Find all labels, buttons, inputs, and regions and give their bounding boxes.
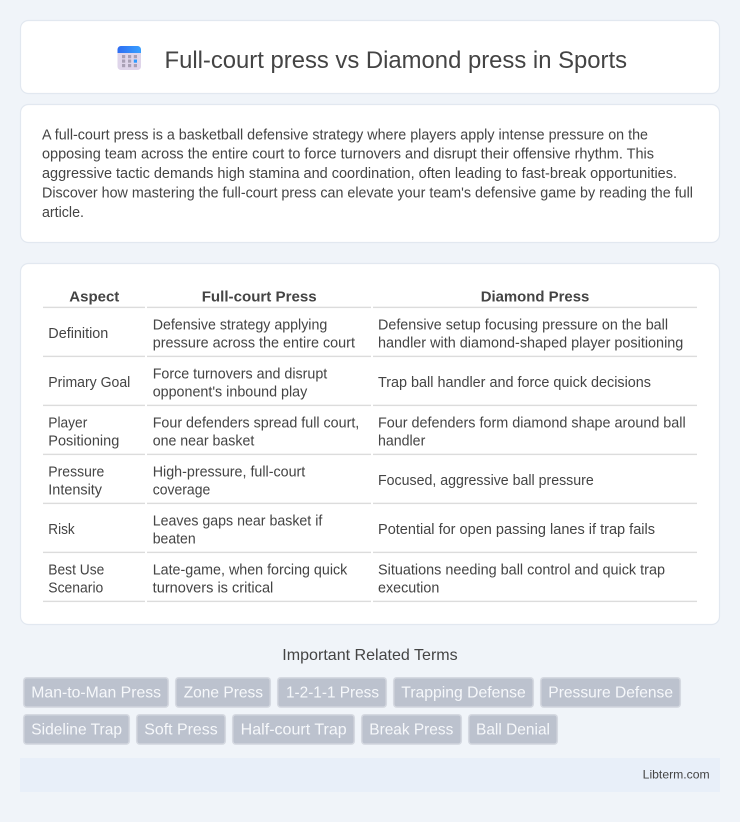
table row: definition: handler with diamond-shaped player positioning (378, 335, 683, 351)
tag: Trapping Defense (394, 678, 533, 707)
tag: Sideline Trap: Sideline Trap (31, 722, 122, 738)
table row: primary goal: Force turnovers and disrupt (153, 366, 327, 382)
tag: Ball Denial (469, 715, 557, 744)
table row: risk: Risk (48, 522, 75, 538)
table header row (43, 289, 697, 308)
tag: Soft Press: Soft Press (144, 722, 218, 738)
table row: primary goal: opponent's inbound play (153, 384, 308, 400)
tag: Man-to-Man Press (24, 678, 168, 707)
table row: pressure intensity: High-pressure, full-court (153, 464, 305, 480)
tag: Break Press (362, 715, 461, 744)
title: Full-court press vs Diamond press in Sports (164, 47, 627, 74)
table row: risk: beaten (153, 531, 196, 547)
footer bar (20, 758, 720, 792)
table row: primary goal: Trap ball handler and force quick decisions (378, 375, 651, 391)
table row: player positioning: Four defenders spread full court, (153, 415, 359, 431)
tag: Trapping Defense: Trapping Defense (401, 684, 526, 702)
table row: best use scenario: Best Use (48, 562, 104, 578)
table header row: Diamond Press (481, 289, 589, 306)
table row: pressure intensity: Intensity (48, 482, 103, 498)
table row: best use scenario: Situations needing ball control and quick trap (378, 562, 665, 578)
tag: Ball Denial: Ball Denial (476, 722, 550, 738)
panel: comparison table (20, 264, 720, 624)
table row: definition: pressure across the entire court (153, 335, 355, 351)
table row: pressure intensity: coverage (153, 482, 210, 498)
table row: primary goal: Primary Goal (48, 375, 130, 391)
table header row: Aspect (69, 289, 119, 306)
table row: pressure intensity: Pressure (48, 464, 104, 480)
table header row: Full-court Press (202, 289, 317, 306)
table row: definition (43, 317, 697, 357)
tag: 1-2-1-1 Press: 1-2-1-1 Press (286, 684, 379, 702)
text block: introduction paragraph: A full-court press is a basketball defensive strategy where players apply intense pressure on the (42, 127, 648, 143)
table row: player positioning: handler (378, 433, 425, 449)
tag: Half-court Trap (233, 715, 354, 744)
table row: best use scenario: execution (378, 580, 439, 596)
table row: pressure intensity (43, 464, 697, 504)
tag: Break Press: Break Press (369, 722, 453, 738)
table row: definition: Definition (48, 326, 108, 342)
text block: introduction paragraph (42, 127, 693, 221)
table row: player positioning (43, 415, 697, 455)
table row: best use scenario (43, 562, 697, 602)
panel: introduction (20, 104, 720, 242)
table row: definition: Defensive setup focusing pressure on the ball (378, 317, 668, 333)
text block: introduction paragraph: article. (42, 205, 84, 221)
table row: player positioning: Four defenders form diamond shape around ball (378, 415, 686, 431)
tag: Half-court Trap: Half-court Trap (241, 722, 347, 738)
icon: calendar (118, 46, 141, 70)
table row: best use scenario: turnovers is critical (153, 580, 273, 596)
tag: Soft Press (137, 715, 225, 744)
text block: introduction paragraph: opposing team across the entire court to force turnovers and disrupt their offensive rhythm. This (42, 147, 654, 163)
text block: introduction paragraph: Discover how mastering the full-court press can elevate your team's defensive game by reading the full (42, 186, 693, 202)
table row: definition: Defensive strategy applying (153, 317, 327, 333)
table row: player positioning: one near basket (153, 433, 254, 449)
table row: player positioning: Positioning (48, 433, 119, 449)
tag: Man-to-Man Press: Man-to-Man Press (31, 684, 161, 702)
tag: Sideline Trap (24, 715, 129, 744)
heading: important related terms: Important Related Terms (282, 647, 458, 664)
tag: Pressure Defense (541, 678, 680, 707)
table row: risk: Potential for open passing lanes if trap fails (378, 522, 655, 538)
footer credit: Libterm.com (643, 768, 710, 782)
table row: player positioning: Player (48, 415, 87, 431)
text block: introduction paragraph: aggressive tactic demands high stamina and coordination, often leading to fast-break opportunities. (42, 166, 677, 182)
table row: best use scenario: Scenario (48, 580, 103, 596)
table row: risk (43, 513, 697, 553)
tag: Pressure Defense: Pressure Defense (548, 684, 673, 702)
tag: 1-2-1-1 Press (278, 678, 386, 707)
related terms tags (24, 678, 680, 744)
tag: Zone Press (176, 678, 270, 707)
table row: best use scenario: Late-game, when forcing quick (153, 562, 348, 578)
table row: pressure intensity: Focused, aggressive ball pressure (378, 473, 594, 489)
tag: Zone Press: Zone Press (184, 684, 263, 702)
panel: header (20, 20, 720, 94)
table row: risk: Leaves gaps near basket if (153, 513, 323, 529)
table row: primary goal (43, 366, 697, 406)
